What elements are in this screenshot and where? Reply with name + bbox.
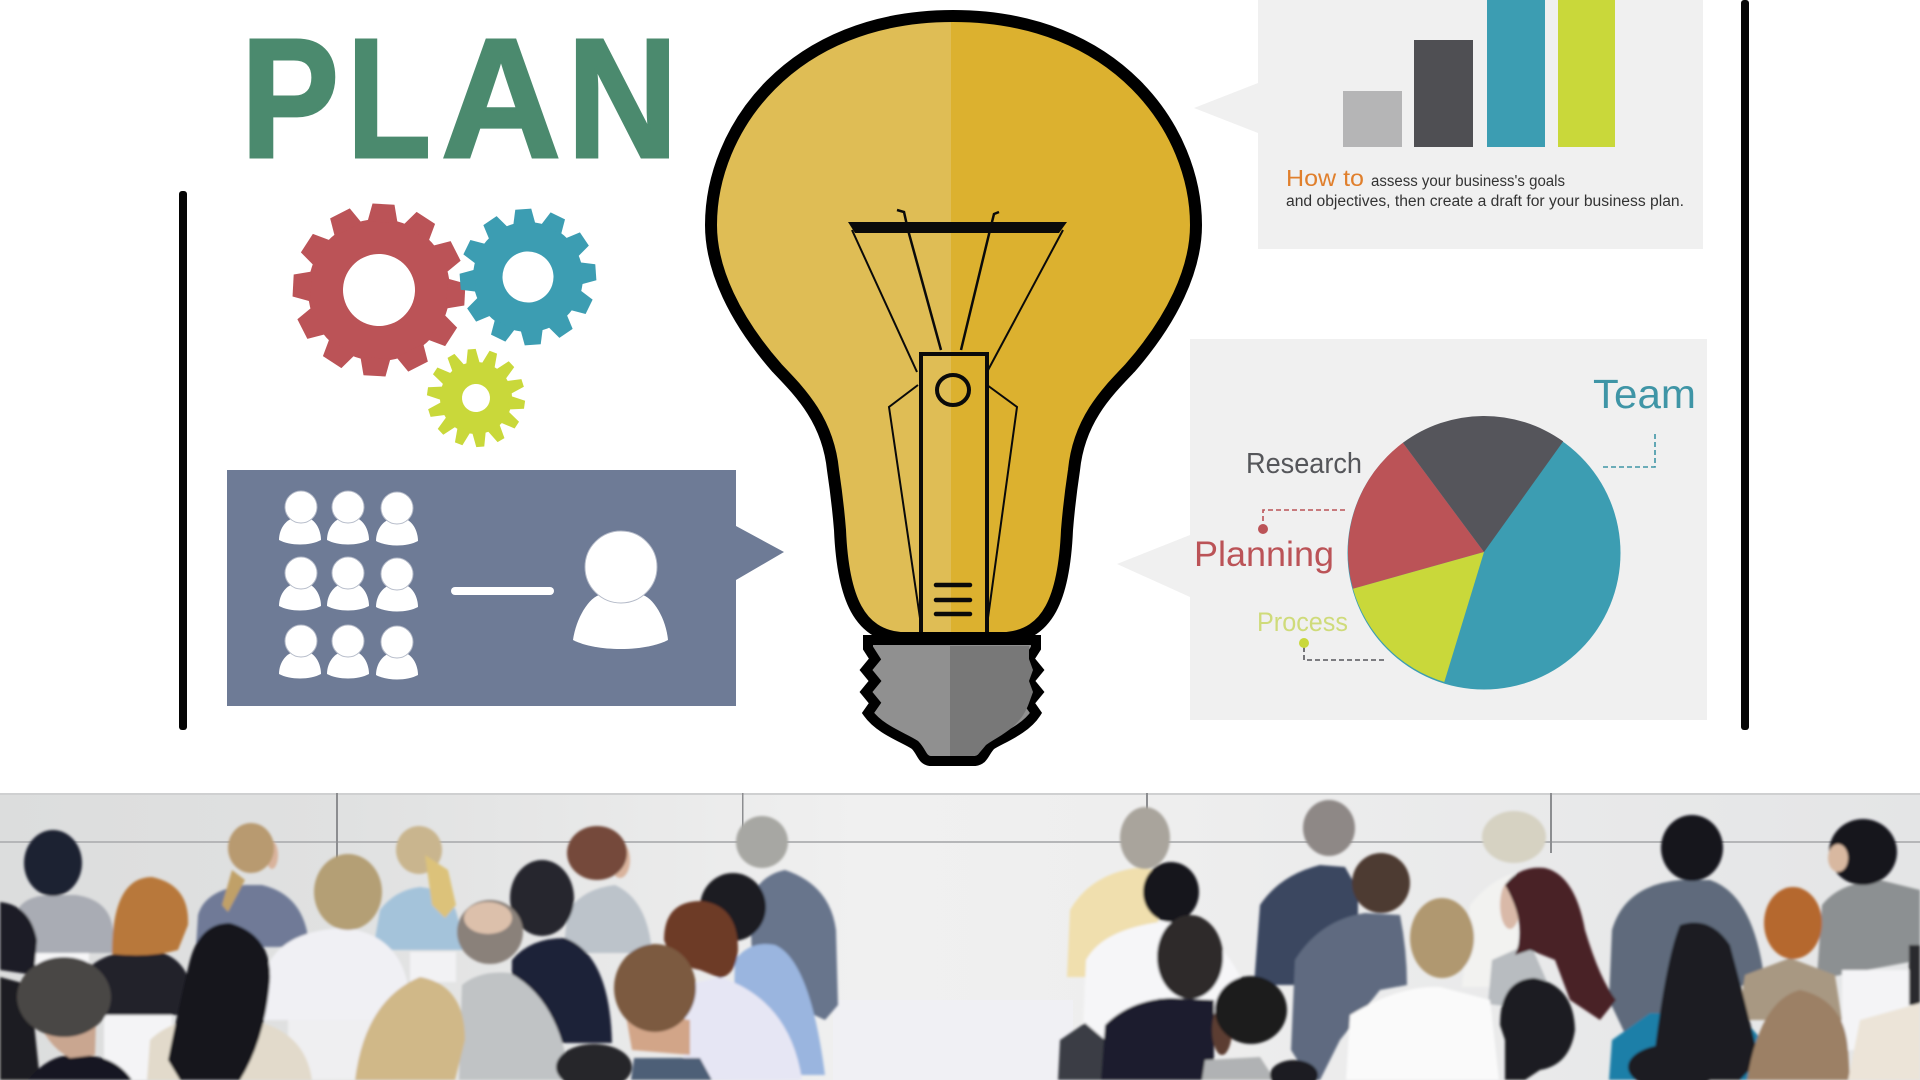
panel: how-to bar chart [1194, 0, 1703, 249]
icon: dash connector [451, 587, 554, 595]
label: Team: Team [1593, 371, 1696, 417]
red gear [289, 200, 469, 380]
right vertical rule [1741, 0, 1749, 730]
chairs [34, 953, 89, 983]
bar chart [1343, 0, 1615, 147]
how-to text: How to [1286, 165, 1364, 191]
how-to text: assess your business's goals [1371, 173, 1565, 190]
photo: seated audience [0, 793, 1920, 1080]
pie chart [1348, 416, 1620, 690]
right middle row [1082, 920, 1251, 1057]
left front row [147, 1018, 312, 1080]
how-to text [1286, 165, 1684, 210]
left middle row [89, 950, 193, 1015]
title: PLAN: A [441, 4, 561, 194]
label: Research: Research [1246, 448, 1362, 480]
label: Process: Process [1257, 607, 1348, 637]
right back row [1067, 868, 1160, 977]
lime gear [423, 345, 529, 451]
panel: pie chart [1117, 339, 1707, 720]
icon: single leader [573, 531, 668, 649]
leader line: Process [1299, 638, 1387, 660]
teal gear [455, 204, 601, 350]
leader line: Team [1602, 434, 1655, 467]
title: PLAN [241, 4, 678, 194]
icon: group of nine people [279, 491, 418, 680]
title: PLAN: L [347, 4, 431, 194]
glass left half [717, 22, 951, 632]
icon: gears [289, 200, 601, 451]
title: PLAN: P [241, 4, 339, 194]
glass right half [951, 22, 1190, 632]
wall and floor [0, 793, 1920, 1080]
back row bodies [12, 895, 113, 953]
label: Planning: Planning [1194, 535, 1334, 574]
how-to text: and objectives, then create a draft for your business plan. [1286, 193, 1684, 210]
audience figures [0, 800, 1920, 1080]
panel: team to leader callout [227, 470, 784, 706]
filament and stem [848, 210, 1067, 634]
title: PLAN: N [567, 4, 678, 194]
glass outline [711, 16, 1196, 638]
left vertical rule [179, 191, 187, 730]
icon: light bulb [711, 16, 1196, 761]
bulb screw base [866, 640, 1038, 761]
leader line: Planning [1258, 510, 1345, 534]
